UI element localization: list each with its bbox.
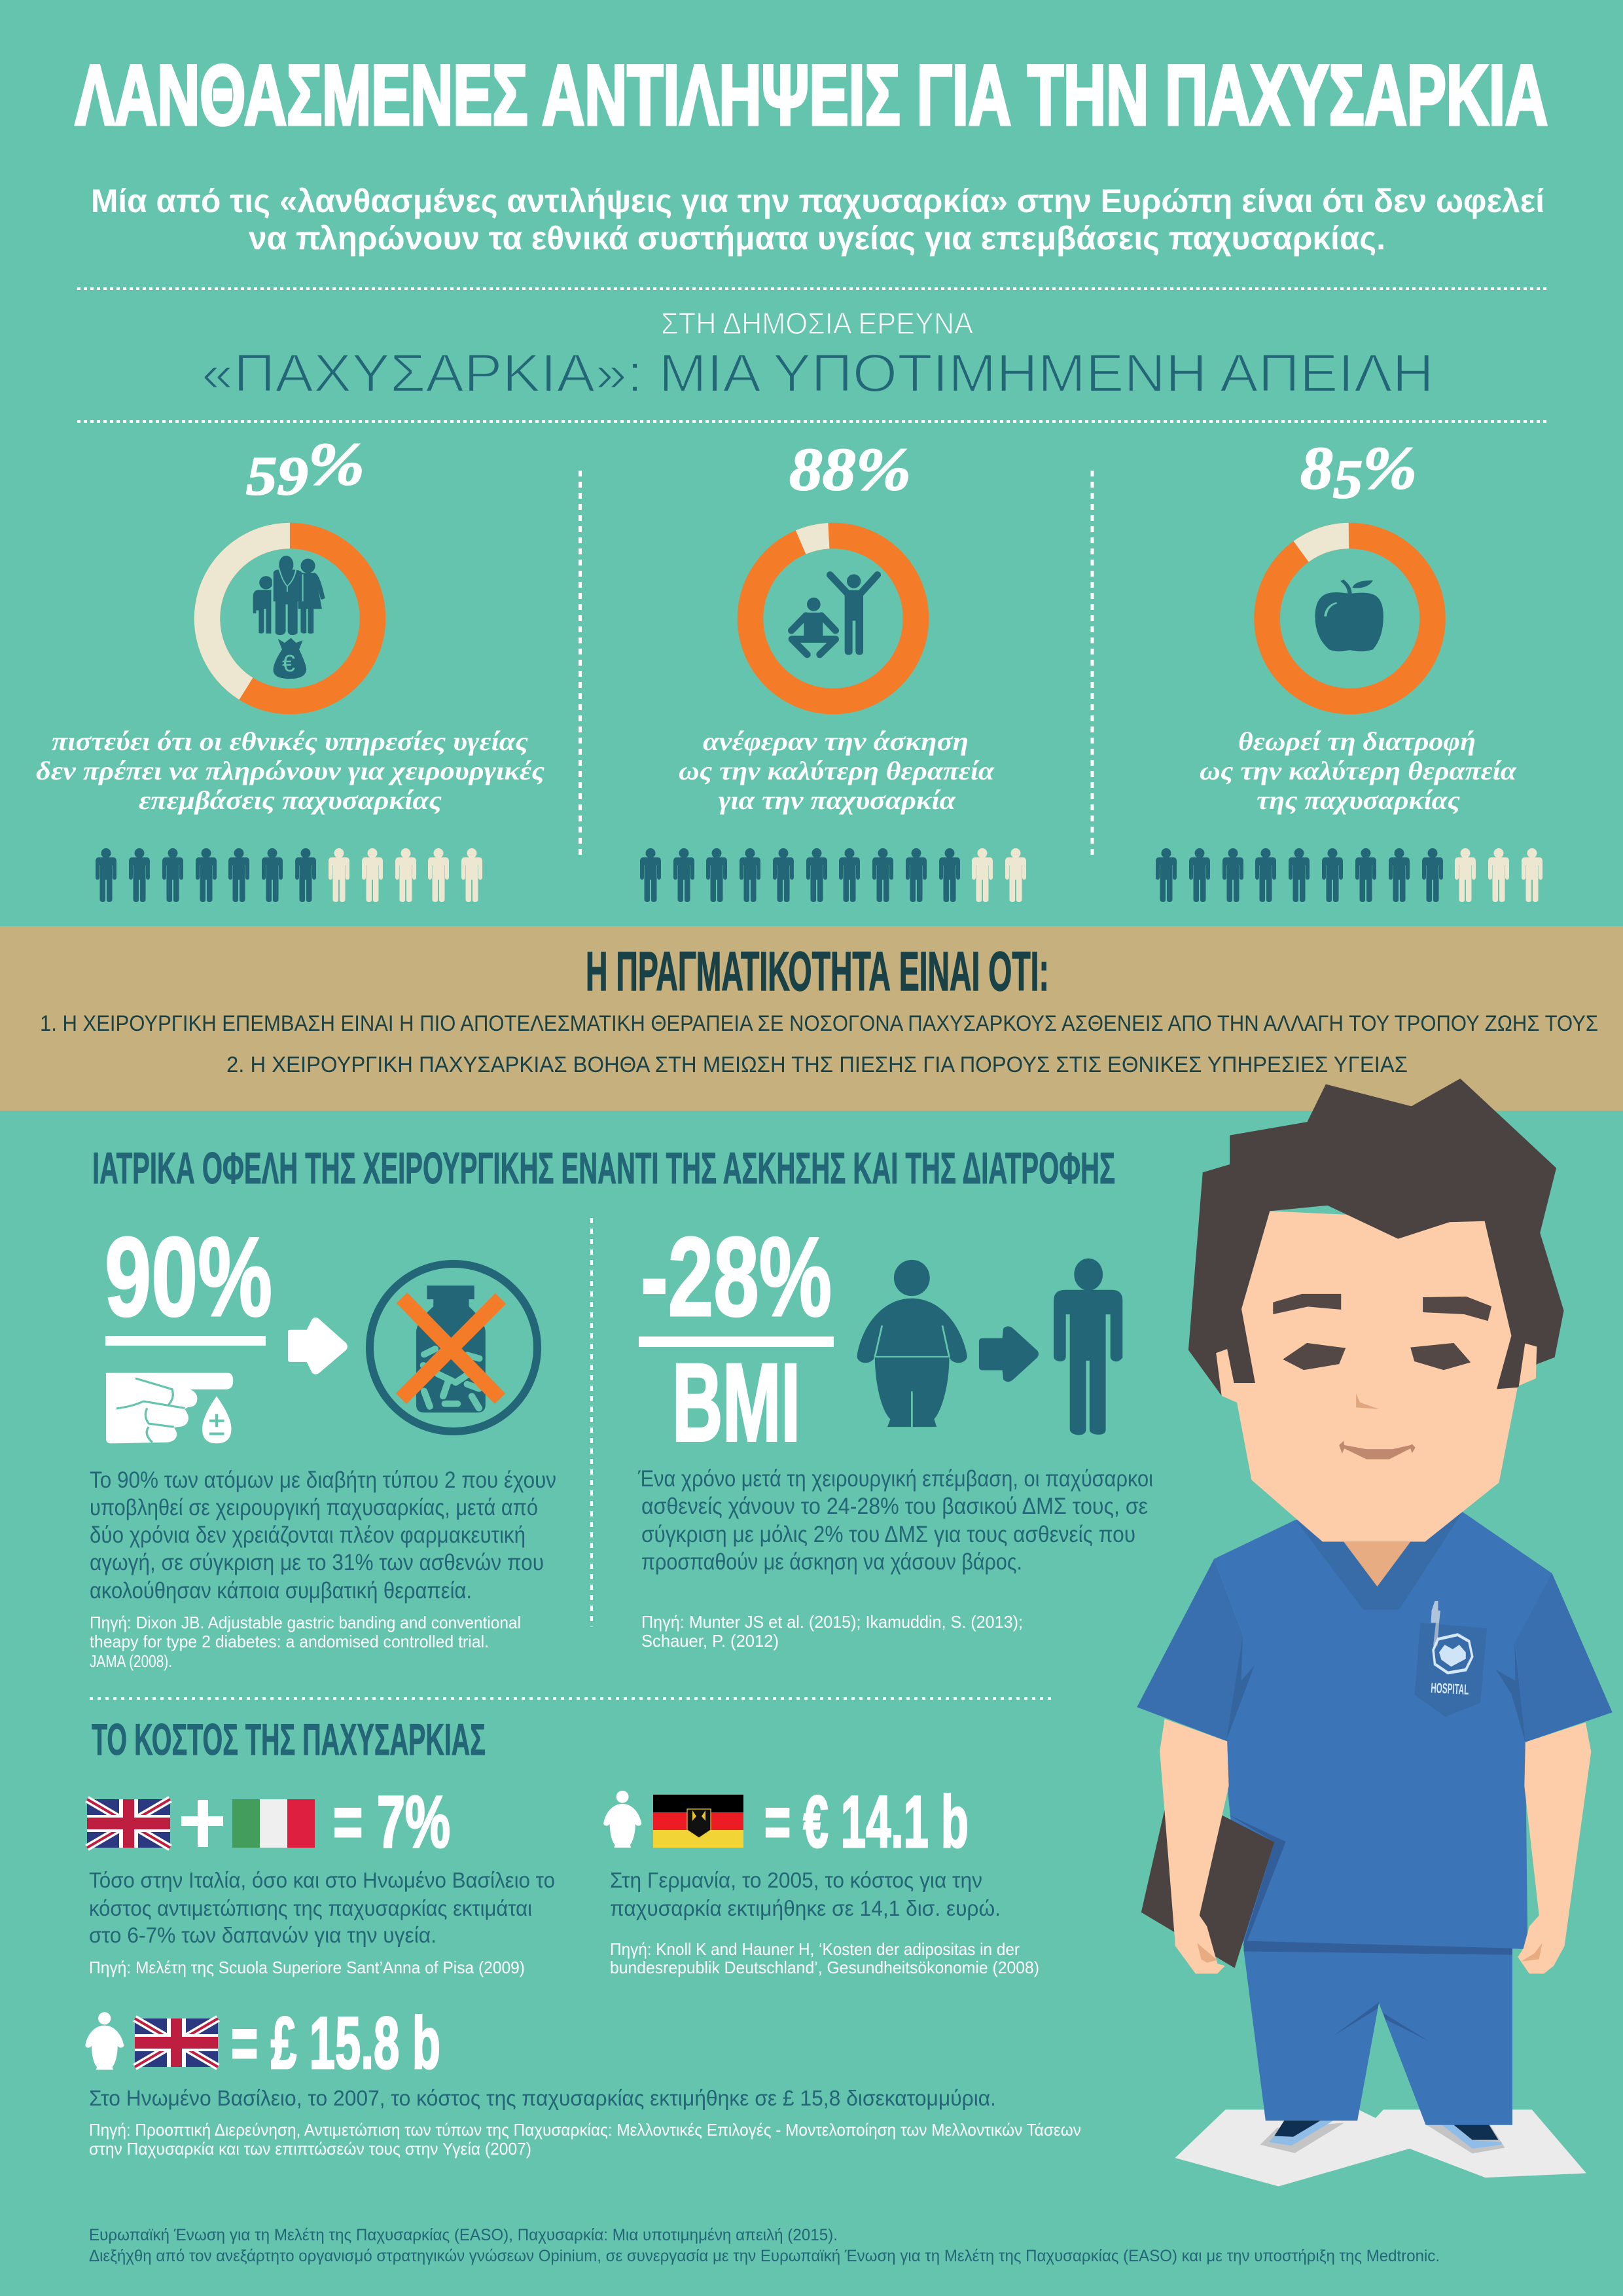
donut chart [1267, 535, 1433, 702]
caption: της παχυσαρκίας [1257, 785, 1460, 815]
body text: Ένα χρόνο μετά τη χειρουργική επέμβαση, οι παχύσαρκοι [637, 1466, 1153, 1492]
body text: παχυσαρκία εκτιμήθηκε σε 14,1 δισ. ευρώ. [610, 1896, 1001, 1920]
panel: BMI benefit [637, 1214, 1153, 1651]
panel: 85 percent [1156, 435, 1543, 902]
source: Πηγή: Dixon JB. Adjustable gastric banding and conventional [90, 1613, 521, 1632]
band text: 2. Η ΧΕΙΡΟΥΡΓΙΚΗ ΠΑΧΥΣΑΡΚΙΑΣ ΒΟΗΘΑ ΣΤΗ ΜΕΙΩΣΗ ΤΗΣ ΠΙΕΣΗΣ ΓΙΑ ΠΟΡΟΥΣ ΣΤΙΣ ΕΘΝΙΚΕΣ ΥΠΗΡΕΣΙΕΣ ΥΓΕΙΑΣ [226, 1052, 1408, 1077]
body text: σύγκριση με μόλις 2% του ΔΜΣ για τους ασθενείς που [641, 1522, 1135, 1547]
caption: ως την καλύτερη θεραπεία [679, 756, 995, 785]
icon: plus sign [181, 1800, 223, 1847]
stat value: % [1363, 435, 1417, 501]
stat value: = € 14.1 b [764, 1781, 969, 1863]
icon: obese figure [857, 1260, 967, 1427]
source: JAMA (2008). [90, 1651, 172, 1671]
arrow [979, 1326, 1039, 1382]
doctor body [1137, 1512, 1613, 2187]
caption: ως την καλύτερη θεραπεία [1200, 756, 1517, 785]
icon: UK flag [87, 1799, 170, 1848]
caption: δεν πρέπει να πληρώνουν για χειρουργικές [36, 756, 544, 785]
BMI label: BMI [672, 1340, 800, 1464]
source: Πηγή: Προοπτική Διερεύνηση, Αντιμετώπιση των τύπων της Παχυσαρκίας: Μελλοντικές Επιλογές - Μοντελοποίηση των Μελλοντικών Τάσεων [89, 2120, 1081, 2140]
survey heading: «ΠΑΧΥΣΑΡΚΙΑ»: ΜΙΑ ΥΠΟΤΙΜΗΜΕΝΗ ΑΠΕΙΛΗ [202, 344, 1434, 403]
stat value: = £ 15.8 b [231, 2002, 440, 2084]
body text: Τόσο στην Ιταλία, όσο και στο Ηνωμένο Βασίλειο το [89, 1868, 555, 1892]
body text: υποβληθεί σε χειρουργική παχυσαρκίας, μετά από [90, 1495, 538, 1520]
source [610, 1939, 1039, 1977]
arrow [288, 1318, 348, 1374]
caption: θεωρεί τη διατροφή [1238, 726, 1476, 756]
caption: ανέφεραν την άσκηση [703, 726, 969, 756]
source [89, 2120, 1081, 2159]
panel: 59 percent [36, 431, 544, 902]
icon: German flag [653, 1795, 743, 1848]
survey kicker: ΣΤΗ ΔΗΜΟΣΙΑ ΕΡΕΥΝΑ [661, 306, 973, 340]
caption [1200, 726, 1517, 815]
panel: Germany cost [603, 1781, 1039, 1977]
donut chart [207, 535, 373, 702]
source: στην Παχυσαρκία και των επιπτώσεών τους στην Υγεία (2007) [89, 2139, 531, 2159]
body text: Στη Γερμανία, το 2005, το κόστος για την [610, 1868, 982, 1892]
icon: apple [1315, 581, 1383, 651]
panel: 90 percent benefit [90, 1214, 556, 1671]
panel: UK cost [85, 2002, 1081, 2159]
body text [90, 1467, 556, 1604]
intro text: να πληρώνουν τα εθνικά συστήματα υγείας για επεμβάσεις παχυσαρκίας. [249, 220, 1385, 257]
panel: 88 percent [640, 436, 1026, 902]
band text [40, 1011, 1598, 1077]
caption: για την παχυσαρκία [719, 785, 956, 815]
pictogram: 10 of 12 [640, 848, 1026, 902]
caption: πιστεύει ότι οι εθνικές υπηρεσίες υγείας [52, 726, 528, 756]
stat value: 88% [789, 436, 911, 503]
source: Πηγή: Μελέτη της Scuola Superiore Sant’Anna of Pisa (2009) [89, 1958, 525, 1977]
source: Schauer, P. (2012) [641, 1631, 779, 1651]
caption [679, 726, 995, 815]
footer credits: Ευρωπαϊκή Ένωση για τη Μελέτη της Παχυσαρκίας (EASO), Παχυσαρκία: Μια υποτιμημένη απειλή (2015). [89, 2226, 838, 2244]
source: theapy for type 2 diabetes: a andomised controlled trial. [90, 1632, 489, 1651]
hospital badge text: HOSPITAL [1431, 1679, 1469, 1698]
source [90, 1613, 521, 1671]
source: Πηγή: Munter JS et al. (2015); Ikamuddin, S. (2013); [641, 1612, 1023, 1632]
body text: Στο Ηνωμένο Βασίλειο, το 2007, το κόστος της παχυσαρκίας εκτιμήθηκε σε £ 15,8 δισεκατομμύρια. [89, 2086, 996, 2110]
icon: Italian flag [232, 1799, 315, 1848]
source [641, 1612, 1023, 1651]
footer credits: Διεξήχθη από τον ανεξάρτητο οργανισμό στρατηγικών γνώσεων Opinium, σε συνεργασία με την Ευρωπαϊκή Ένωση για τη Μελέτη της Παχυσαρκίας (EASO) και με την υποστήριξη της Medtronic. [89, 2247, 1440, 2265]
heading: cost of obesity: ΤΟ ΚΟΣΤΟΣ ΤΗΣ ΠΑΧΥΣΑΡΚΙΑΣ [92, 1715, 486, 1765]
footer credits [89, 2226, 1440, 2265]
donut chart [750, 535, 916, 702]
icon: UK flag [135, 2018, 218, 2067]
icon: exercising people [791, 574, 878, 655]
stat value: % [308, 431, 365, 497]
illustration: doctor [1137, 1079, 1613, 2187]
body text [89, 1868, 555, 1947]
body text: ακολούθησαν κάποια συμβατική θεραπεία. [90, 1578, 472, 1604]
body text [610, 1868, 1001, 1920]
caption [36, 726, 544, 815]
divider bar [105, 1336, 266, 1346]
band heading: Η ΠΡΑΓΜΑΤΙΚΟΤΗΤΑ ΕΙΝΑΙ ΟΤΙ: [586, 941, 1049, 1002]
intro text: Μία από τις «λανθασμένες αντιλήψεις για την παχυσαρκία» στην Ευρώπη είναι ότι δεν ωφελεί [91, 183, 1544, 219]
body text: δύο χρόνια δεν χρειάζονται πλέον φαρμακευτική [90, 1522, 526, 1548]
body text: Το 90% των ατόμων με διαβήτη τύπου 2 που έχουν [90, 1467, 556, 1493]
source: Πηγή: Knoll K and Hauner H, ‘Kosten der adipositas in der [610, 1939, 1020, 1959]
divider bar [639, 1336, 834, 1347]
stat value: 59 [246, 446, 308, 507]
stat value: 5 [1333, 449, 1363, 510]
pictogram: 9 of 12 [1156, 848, 1543, 902]
panel: UK and Italy cost [87, 1781, 555, 1977]
icon: finger and blood drop [106, 1373, 233, 1443]
caption: επεμβάσεις παχυσαρκίας [139, 785, 442, 815]
body text: αγωγή, σε σύγκριση με το 31% των ασθενών που [90, 1550, 544, 1575]
body text: στο 6-7% των δαπανών για την υγεία. [89, 1923, 437, 1947]
icon: obese figure [85, 2012, 124, 2070]
body text: προσπαθούν με άσκηση να χάσουν βάρος. [641, 1549, 1022, 1575]
body text: ασθενείς χάνουν το 24-28% του βασικού ΔΜΣ τους, σε [641, 1494, 1148, 1519]
icon: euro sign: € [282, 650, 295, 677]
intro text [91, 183, 1544, 257]
icon: obese figure [603, 1791, 641, 1848]
doctor head [1188, 1079, 1564, 1542]
stat value: 8 [1300, 435, 1330, 501]
stat value: -28% [641, 1214, 832, 1340]
stat value: 90% [105, 1214, 272, 1340]
icon: crossed-out pill bottle [370, 1264, 537, 1431]
source: bundesrepublik Deutschland’, Gesundheitsökonomie (2008) [610, 1958, 1039, 1977]
pictogram: 7 of 12 [96, 848, 482, 902]
body text [637, 1466, 1153, 1575]
panel: reality band [0, 926, 1623, 1111]
stat value: = 7% [333, 1781, 450, 1863]
icon: slim figure [1054, 1259, 1122, 1435]
icon: family and money bag [253, 556, 325, 679]
body text: κόστος αντιμετώπισης της παχυσαρκίας εκτιμάται [89, 1896, 532, 1920]
